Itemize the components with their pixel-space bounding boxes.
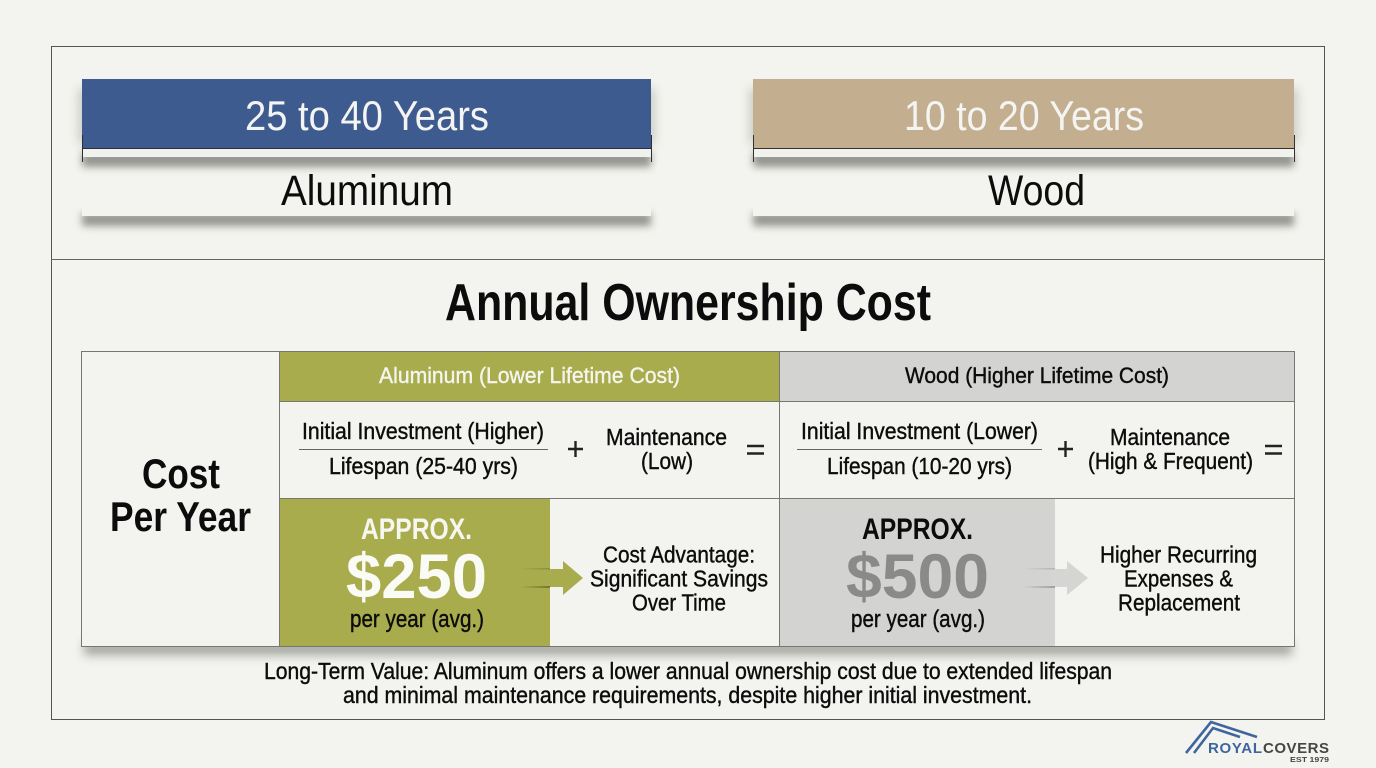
value cell: aluminum: APPROX. xyxy=(361,513,472,546)
formula: aluminum xyxy=(299,418,764,479)
material label: Aluminum: Aluminum xyxy=(281,167,453,215)
lifespan label: 25 to 40 Years: 25 to 40 Years xyxy=(245,92,489,139)
text: higher recurring: Replacement xyxy=(1118,590,1241,616)
table grid xyxy=(82,351,1295,646)
formula: aluminum: Lifespan (25-40 yrs) xyxy=(329,453,518,479)
header: wood: Wood (Higher Lifetime Cost) xyxy=(905,363,1169,388)
footer note: Long-Term Value: Aluminum offers a lower annual ownership cost due to extended lifespan xyxy=(264,658,1112,684)
value cell: aluminum xyxy=(280,498,550,646)
value cell: wood xyxy=(780,498,1055,646)
formula: wood: (High & Frequent) xyxy=(1088,448,1253,474)
formula: wood: Maintenance xyxy=(1110,424,1230,450)
logo: Royal Covers: EST 1979 xyxy=(1290,755,1329,764)
formula: aluminum: Initial Investment (Higher) xyxy=(302,418,544,444)
text: higher recurring: Expenses & xyxy=(1124,566,1233,592)
heading: Annual Ownership Cost xyxy=(445,274,931,332)
value cell: wood: APPROX. xyxy=(862,513,973,546)
text: cost advantage: Over Time xyxy=(632,590,726,616)
header: aluminum xyxy=(279,351,779,401)
header: aluminum: Aluminum (Lower Lifetime Cost) xyxy=(379,363,680,388)
lifespan label: 10 to 20 Years: 10 to 20 Years xyxy=(904,92,1144,139)
panel: cost table xyxy=(81,351,1295,655)
value cell: aluminum: $250 xyxy=(346,542,487,612)
text: cost advantage: Cost Advantage: xyxy=(603,542,755,568)
text: cost advantage xyxy=(590,542,768,616)
text: cost advantage: Significant Savings xyxy=(590,566,768,592)
arrow: wood expenses xyxy=(1023,561,1088,595)
panel: aluminum lifespan xyxy=(78,79,655,226)
value cell: aluminum: per year (avg.) xyxy=(350,606,484,633)
row label: cost per year: Per Year xyxy=(110,493,251,540)
material label: Wood: Wood xyxy=(988,167,1085,215)
formula: wood: Lifespan (10-20 yrs) xyxy=(827,453,1012,479)
panel: wood lifespan xyxy=(749,79,1298,226)
row label: cost per year xyxy=(110,450,251,540)
header: wood xyxy=(779,351,1295,401)
text: higher recurring xyxy=(1100,542,1257,616)
formula: aluminum: (Low) xyxy=(641,448,693,474)
arrow: aluminum advantage xyxy=(520,561,583,595)
logo: Royal Covers: ROYAL xyxy=(1208,740,1262,757)
value cell: wood: $500 xyxy=(846,542,989,612)
text: higher recurring: Higher Recurring xyxy=(1100,542,1257,568)
footer note xyxy=(264,658,1112,708)
value cell: wood: per year (avg.) xyxy=(851,606,985,633)
logo: Royal Covers xyxy=(1186,722,1329,764)
footer note: and minimal maintenance requirements, despite higher initial investment. xyxy=(343,682,1032,708)
logo: Royal Covers: COVERS xyxy=(1263,740,1329,757)
row label: cost per year: Cost xyxy=(142,450,220,497)
formula: wood xyxy=(797,418,1282,479)
formula: aluminum: Maintenance xyxy=(606,424,727,450)
formula: wood: Initial Investment (Lower) xyxy=(801,418,1038,444)
